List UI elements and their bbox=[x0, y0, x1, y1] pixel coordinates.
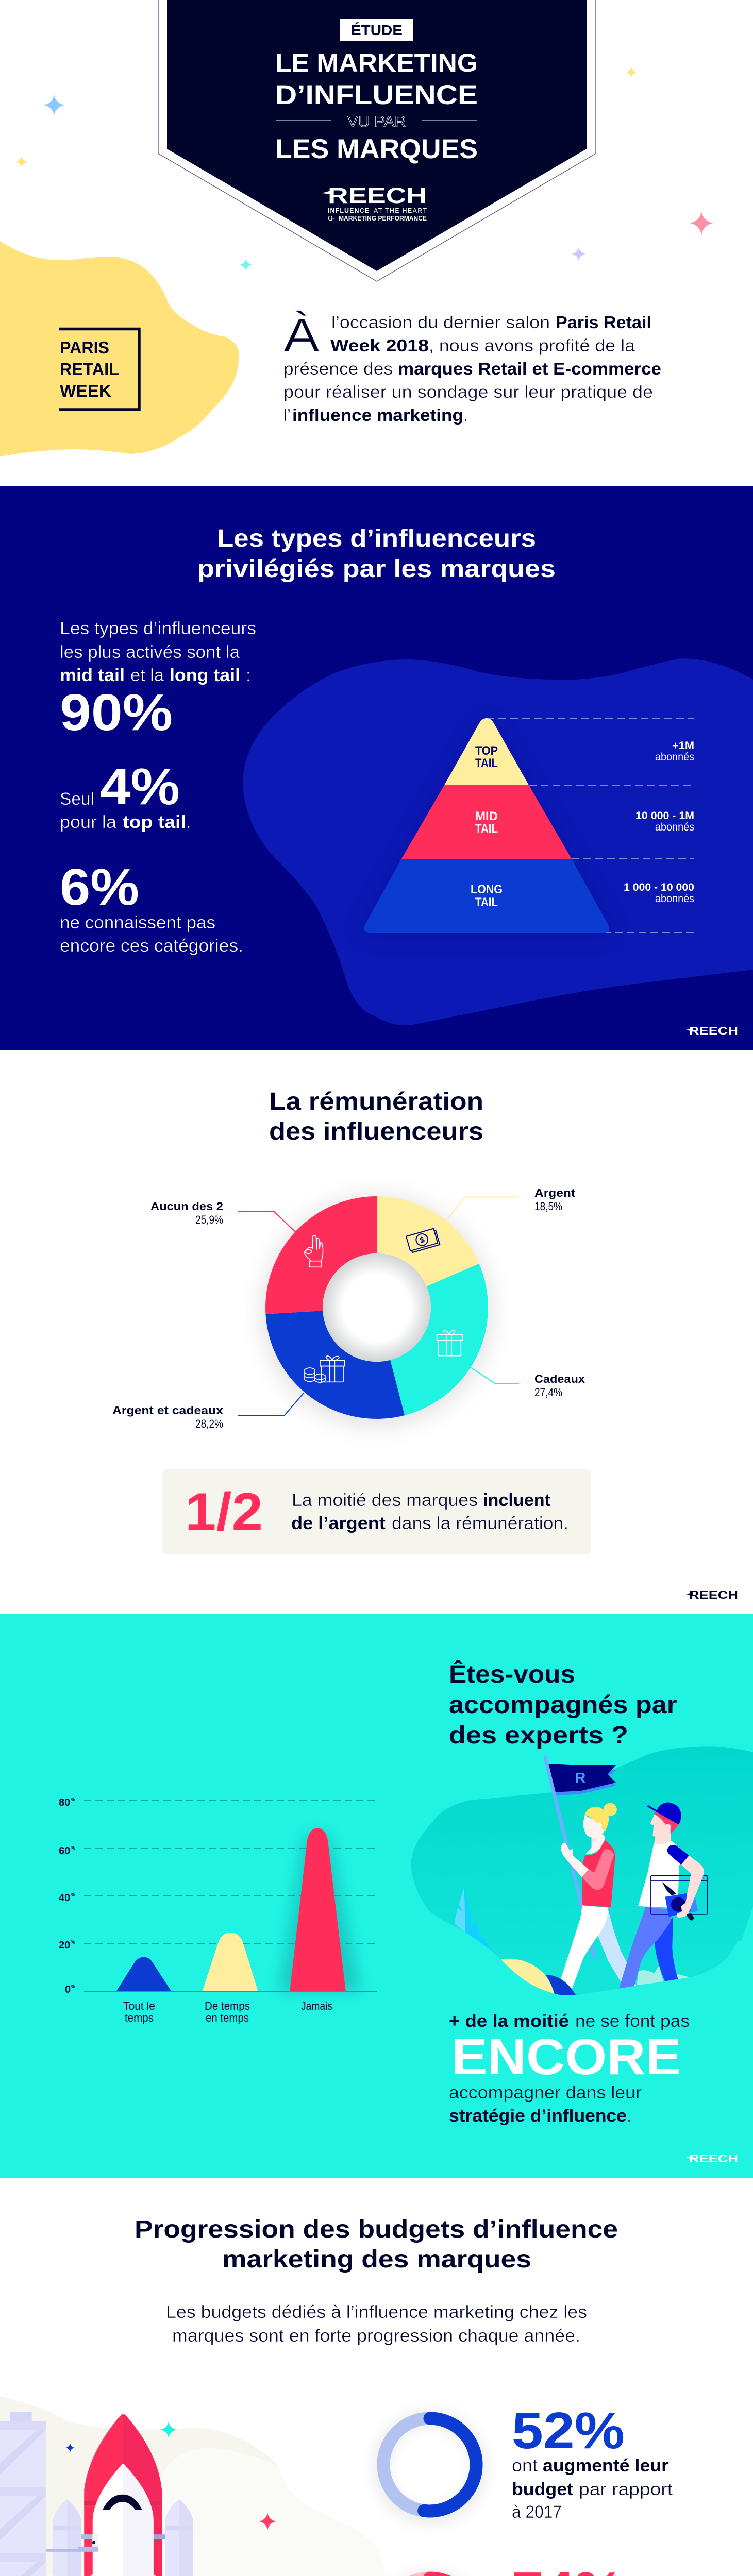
stats text: encore ces catégories. bbox=[60, 936, 243, 956]
pyramid chart: 1 000 - 10 000 bbox=[624, 882, 694, 893]
text: encore: stratégie d’influence bbox=[449, 2106, 627, 2126]
header badge bbox=[158, 0, 596, 281]
pyramid chart: abonnés bbox=[655, 893, 694, 905]
sparkles bbox=[15, 66, 713, 271]
blob: yellow corner bbox=[0, 241, 239, 456]
donut labels: 28,2% bbox=[195, 1417, 223, 1430]
bar chart: % bbox=[71, 1984, 75, 1990]
donut labels: Argent bbox=[534, 1187, 576, 1199]
intro paragraph bbox=[283, 309, 661, 425]
bar chart: Jamais bbox=[301, 1999, 332, 2012]
heading: La rémunération bbox=[269, 1088, 483, 1115]
stats text: top tail bbox=[123, 812, 186, 832]
logo: reech: REECH bbox=[689, 1025, 738, 1037]
heading bbox=[269, 1088, 483, 1145]
stat: 52%: augmenté leur bbox=[543, 2456, 668, 2476]
label: étude bbox=[340, 19, 413, 41]
logo: reech: AT THE HEART bbox=[374, 207, 427, 214]
callout: incluent bbox=[483, 1490, 550, 1510]
logo: reech: REECH bbox=[689, 1589, 738, 1601]
bar chart: % bbox=[71, 1892, 75, 1898]
illustration: blob and walkers bbox=[411, 1746, 753, 2016]
main title: LE MARKETING bbox=[275, 48, 478, 77]
main title: LES MARQUES bbox=[275, 134, 478, 164]
stats text: ne connaissent pas bbox=[60, 913, 215, 933]
donut labels bbox=[112, 1187, 585, 1430]
bar chart: 40 bbox=[59, 1892, 70, 1904]
heading bbox=[135, 2216, 618, 2273]
label: paris retail week: RETAIL bbox=[60, 360, 119, 379]
panel: types d'influenceurs bbox=[0, 486, 753, 1050]
bar chart: % bbox=[71, 1940, 75, 1945]
heading: marketing des marques bbox=[222, 2246, 531, 2273]
callout: 1/2 bbox=[185, 1482, 263, 1542]
stats text: 90% bbox=[60, 684, 173, 741]
pyramid chart: MID bbox=[475, 809, 498, 823]
bar chart: en temps bbox=[206, 2011, 249, 2024]
text: encore: . bbox=[627, 2106, 631, 2126]
intro paragraph: présence des bbox=[283, 359, 393, 378]
ring chart: 52% bbox=[381, 2418, 479, 2517]
stats text bbox=[60, 619, 256, 956]
main title bbox=[275, 48, 478, 164]
stats text: mid tail bbox=[60, 666, 125, 685]
stat: 52%: budget bbox=[512, 2480, 573, 2499]
bar chart: Tout le bbox=[123, 1999, 155, 2012]
stats text: et la bbox=[130, 666, 164, 685]
logo: reech: MARKETING PERFORMANCE bbox=[339, 215, 427, 222]
callout: dans la rémunération. bbox=[392, 1514, 568, 1533]
section: header bbox=[0, 0, 753, 486]
logo: reech bbox=[322, 183, 427, 222]
stat: 52% bbox=[512, 2402, 673, 2522]
panel: experts bbox=[0, 1614, 753, 2178]
donut labels: 27,4% bbox=[534, 1386, 562, 1399]
icon: flag: R bbox=[575, 1770, 585, 1786]
callout: La moitié des marques bbox=[292, 1490, 478, 1510]
label: paris retail week: WEEK bbox=[60, 381, 111, 400]
intro text: Les budgets dédiés à l’influence marketing chez les bbox=[166, 2302, 587, 2322]
stats text: Les types d’influenceurs bbox=[60, 619, 256, 638]
icons: $ bbox=[419, 1234, 426, 1245]
heading: Êtes-vous bbox=[449, 1660, 575, 1688]
pyramid chart: +1M bbox=[672, 740, 694, 752]
heading bbox=[197, 525, 556, 583]
icons bbox=[305, 1228, 463, 1382]
pyramid chart: 10 000 - 1M bbox=[635, 810, 694, 822]
stat: 52%: ont bbox=[512, 2456, 538, 2476]
heading: privilégiés par les marques bbox=[197, 555, 556, 583]
stat: 52%: par rapport bbox=[579, 2480, 673, 2499]
stats text: long tail bbox=[170, 666, 240, 685]
stats text: Seul bbox=[60, 789, 94, 809]
label: paris retail week bbox=[59, 329, 139, 410]
main title: VU PAR bbox=[347, 113, 406, 130]
panel: budgets bbox=[0, 2178, 753, 2576]
intro paragraph: Paris Retail bbox=[556, 313, 651, 332]
callout: de l’argent bbox=[291, 1514, 386, 1533]
icon: flag bbox=[547, 1764, 616, 1796]
text: encore: accompagner dans leur bbox=[449, 2083, 642, 2103]
pyramid chart: abonnés bbox=[655, 751, 694, 763]
stats text: les plus activés sont la bbox=[60, 642, 240, 662]
heading: Progression des budgets d’influence bbox=[135, 2216, 618, 2243]
text: encore bbox=[449, 2011, 690, 2126]
pyramid chart: LONG bbox=[471, 883, 503, 896]
intro text bbox=[166, 2302, 587, 2346]
donut leader lines bbox=[238, 1197, 519, 1415]
pyramid chart: abonnés bbox=[655, 821, 694, 833]
intro paragraph: . bbox=[463, 405, 468, 425]
stats text: pour la bbox=[60, 812, 116, 832]
text: encore: ENCORE bbox=[451, 2028, 681, 2085]
intro paragraph: pour réaliser un sondage sur leur pratique de bbox=[283, 382, 653, 401]
bar chart bbox=[59, 1797, 377, 2024]
stat: 52%: 52% bbox=[512, 2402, 625, 2460]
text: encore: + de la moitié bbox=[449, 2011, 569, 2031]
intro paragraph: À bbox=[283, 309, 320, 362]
stats text: 6% bbox=[60, 858, 139, 916]
intro text: marques sont en forte progression chaque année. bbox=[172, 2326, 580, 2346]
pyramid chart: TAIL bbox=[475, 822, 498, 836]
intro paragraph: influence marketing bbox=[292, 405, 463, 425]
intro paragraph: Week 2018 bbox=[330, 336, 429, 355]
intro paragraph: marques Retail et E-commerce bbox=[398, 359, 661, 378]
stats text: 4% bbox=[100, 758, 180, 816]
intro paragraph: l’occasion du dernier salon bbox=[331, 313, 550, 332]
pyramid chart: TAIL bbox=[475, 756, 498, 770]
stat: 52%: à 2017 bbox=[512, 2502, 562, 2522]
logo: reech: OF bbox=[328, 215, 335, 222]
donut labels: 25,9% bbox=[195, 1213, 223, 1226]
heading: des influenceurs bbox=[269, 1118, 483, 1145]
donut labels: Cadeaux bbox=[534, 1372, 585, 1385]
pyramid chart: TAIL bbox=[475, 895, 498, 909]
bar chart: 0 bbox=[65, 1984, 71, 1995]
pyramid chart bbox=[363, 718, 694, 933]
bar chart: % bbox=[71, 1845, 75, 1851]
bar chart: % bbox=[71, 1797, 75, 1803]
bar chart: 20 bbox=[59, 1940, 70, 1951]
donut labels: 18,5% bbox=[534, 1200, 562, 1213]
stats text: : bbox=[246, 666, 250, 685]
heading: des experts ? bbox=[449, 1722, 628, 1749]
callout bbox=[162, 1469, 591, 1554]
stats text: . bbox=[186, 812, 191, 832]
pyramid chart: TOP bbox=[475, 744, 498, 758]
label: paris retail week: PARIS bbox=[60, 338, 109, 357]
bar chart: 80 bbox=[59, 1797, 70, 1808]
bar chart: temps bbox=[125, 2011, 154, 2024]
panel: rémunération bbox=[0, 1050, 753, 1614]
text: encore: ne se font pas bbox=[575, 2011, 690, 2031]
bar chart: De temps bbox=[205, 1999, 250, 2012]
logo: reech: REECH bbox=[689, 2153, 738, 2165]
intro paragraph: , nous avons profité de la bbox=[429, 336, 635, 355]
blob background bbox=[243, 658, 753, 1025]
illustration: rocket bbox=[0, 2396, 384, 2576]
heading: accompagnés par bbox=[449, 1691, 677, 1719]
logo: reech: INFLUENCE bbox=[328, 207, 369, 214]
donut labels: Aucun des 2 bbox=[150, 1200, 223, 1213]
donut labels: Argent et cadeaux bbox=[112, 1404, 224, 1417]
intro paragraph: l’ bbox=[283, 405, 291, 425]
logo: reech: REECH bbox=[328, 183, 427, 208]
donut chart bbox=[112, 1187, 585, 1430]
heading: Les types d’influenceurs bbox=[217, 525, 536, 552]
bar chart: 60 bbox=[59, 1845, 70, 1857]
label: étude: ÉTUDE bbox=[351, 22, 403, 38]
heading bbox=[449, 1660, 677, 1749]
main title: D’INFLUENCE bbox=[275, 80, 478, 110]
